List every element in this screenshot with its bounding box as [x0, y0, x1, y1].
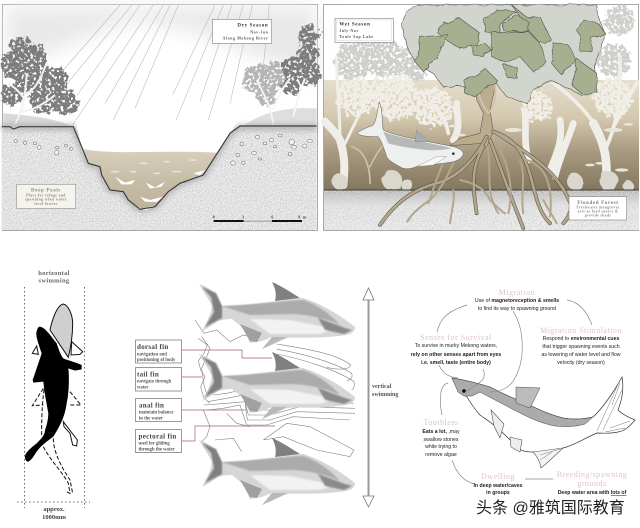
- mangrove roots: [380, 132, 572, 228]
- label: approx. 1000mm: 1000mm: [42, 514, 66, 521]
- annotation: toothless: Eats a lot, ,may: [422, 429, 460, 435]
- label: wet season: [335, 18, 393, 42]
- callout: tail fin: tail fin: [137, 370, 159, 378]
- heading: horizontal swimming: horizontal: [38, 270, 70, 277]
- annotation: toothless: remove algae: [425, 452, 457, 458]
- label: flooded forest: acts as food source &: [578, 209, 618, 213]
- callout: pectoral fin: through the water: [138, 448, 175, 452]
- fish: middle: [199, 352, 355, 419]
- label: deep pools: Place for refuge and: [26, 193, 66, 197]
- annotation: toothless: while trying to: [425, 444, 457, 450]
- annotation: breeding/spawning grounds: [557, 470, 627, 496]
- panel: dry season: [0, 4, 321, 230]
- annotation: senses for survival: Senses for Survival: [420, 333, 492, 342]
- callout: anal fin: [136, 398, 182, 422]
- small fish school: [449, 123, 633, 172]
- leader lines: [182, 350, 275, 441]
- annotation: breeding/spawning grounds: grounds: [577, 479, 607, 488]
- background foliage: [333, 5, 635, 85]
- mangrove trunk: [450, 80, 497, 148]
- annotation: toothless: Toothless: [423, 418, 459, 427]
- annotation: senses for survival: rely on other senses apart from eyes: [411, 352, 501, 358]
- scale bar: 6: [271, 216, 273, 220]
- callout: dorsal fin: [136, 340, 182, 363]
- sky haze: [7, 7, 317, 77]
- annotation: dwelling: In deep water/caves: [473, 483, 523, 489]
- green leaves: [415, 5, 605, 97]
- annotation: migration stimulation: as lowering of water level and flow: [541, 352, 621, 358]
- label: approx. 1000mm: approx.: [43, 506, 65, 513]
- annotation: toothless: [422, 418, 460, 458]
- soil: [324, 190, 639, 230]
- bushes: [332, 170, 634, 191]
- water column: [324, 80, 639, 190]
- label: flooded forest: [569, 197, 627, 220]
- callout: tail fin: navigate through: [137, 380, 172, 384]
- scale bar: 3: [242, 216, 244, 220]
- annotation: dwelling: Dwelling: [481, 472, 515, 481]
- annotation: migration: to find its way to spawning ground: [478, 306, 556, 312]
- annotation: senses for survival: [411, 333, 501, 366]
- dashed fish outline: [32, 383, 81, 493]
- callout: tail fin: water: [137, 386, 148, 390]
- callout: dorsal fin: dorsal fin: [137, 343, 169, 351]
- heading: horizontal swimming: swimming: [39, 278, 70, 284]
- scale bar: 9 m: [298, 216, 307, 220]
- label: flooded forest: provide shade: [585, 213, 611, 217]
- label: dry season: Dry Season: [237, 24, 268, 29]
- stippled fish outline: [32, 304, 83, 446]
- label: deep pools: [17, 184, 76, 208]
- catfish anatomy drawing: [452, 377, 635, 468]
- background white trees: [325, 57, 637, 187]
- panel: anatomy annotations: [411, 288, 635, 496]
- label: vertical swimming: swimming: [372, 392, 398, 398]
- label: dry season: Nov-Jun: [250, 29, 269, 34]
- label: deep pools: spawning when water: [25, 198, 67, 202]
- annotation: migration: Use of magnetoreception & smells: [475, 298, 559, 304]
- annotation: breeding/spawning grounds: Breeding/spawning: [557, 470, 627, 479]
- callout: dorsal fin: navigation and: [137, 352, 167, 358]
- annotation: senses for survival: To survive in murky Mekong waters,: [415, 343, 497, 349]
- arrow: vertical swimming: [363, 288, 374, 507]
- label: deep pools: level lowers: [35, 202, 58, 206]
- callout: pectoral fin: [136, 430, 182, 452]
- annotation: migration: [475, 288, 559, 312]
- grey leaves: [402, 5, 605, 103]
- connector curves: [437, 300, 592, 484]
- scale bar: 0: [213, 216, 215, 220]
- annotation: migration stimulation: [540, 326, 622, 366]
- callout: pectoral fin: used for gliding: [138, 442, 170, 446]
- big tree canopy: [402, 5, 605, 103]
- annotation: migration stimulation: Migration Stimulation: [540, 326, 622, 335]
- annotation: toothless: swallow stones: [424, 437, 459, 443]
- fish: top: [199, 282, 355, 349]
- contour lines between fish: [195, 320, 355, 457]
- callout: dorsal fin: positioning of body: [137, 358, 176, 363]
- label: wet season: Tonle Sap Lake: [339, 34, 374, 39]
- panel: vertical swimming fish stack: [136, 282, 398, 507]
- panel: wet season: [324, 4, 639, 230]
- label: dry season: Along Mekong River: [222, 36, 268, 41]
- annotation: breeding/spawning grounds: Deep water area with lots of: [558, 490, 627, 496]
- label: wet season: July-Nov: [339, 28, 359, 33]
- label: dry season: [212, 19, 272, 43]
- callout: anal fin: maintain balance: [139, 410, 174, 416]
- pebbles: [14, 134, 312, 165]
- watermark: 头条 @雅筑国际教育: [476, 499, 625, 517]
- right tree: [243, 24, 321, 126]
- left tree: [0, 37, 78, 127]
- callout: anal fin: in the water: [139, 416, 163, 422]
- catfish: [357, 102, 463, 169]
- callout: tail fin: [136, 368, 182, 391]
- callout: pectoral fin: pectoral fin: [138, 432, 177, 440]
- annotation: senses for survival: i.e. smell, taste (entire body): [421, 360, 491, 366]
- annotation: dwelling: in groups: [486, 490, 510, 496]
- scale bar: [213, 216, 307, 222]
- sun rays: [63, 5, 269, 128]
- annotation: migration stimulation: velocity (dry season): [557, 360, 605, 366]
- label: wet season: Wet Season: [339, 23, 371, 28]
- label: flooded forest: Freshwater mangroves: [577, 205, 620, 209]
- annotation: migration: Migration: [499, 288, 535, 297]
- annotation: dwelling: [473, 472, 523, 496]
- ground section: [2, 120, 317, 230]
- label: deep pools: Deep Pools: [31, 188, 61, 193]
- annotation: migration stimulation: Respond to environmental cues: [543, 336, 619, 342]
- annotation: migration stimulation: that trigger spawning events such: [542, 344, 620, 350]
- callout: anal fin: anal fin: [139, 402, 164, 410]
- panel: horizontal swimming diagram: [17, 270, 90, 521]
- fish: bottom: [199, 438, 355, 505]
- width guides: [17, 287, 90, 508]
- black fish: [25, 327, 82, 462]
- water pool: [83, 149, 217, 209]
- label: flooded forest: Flooded Forest: [577, 201, 619, 206]
- label: vertical swimming: vertical: [372, 384, 392, 390]
